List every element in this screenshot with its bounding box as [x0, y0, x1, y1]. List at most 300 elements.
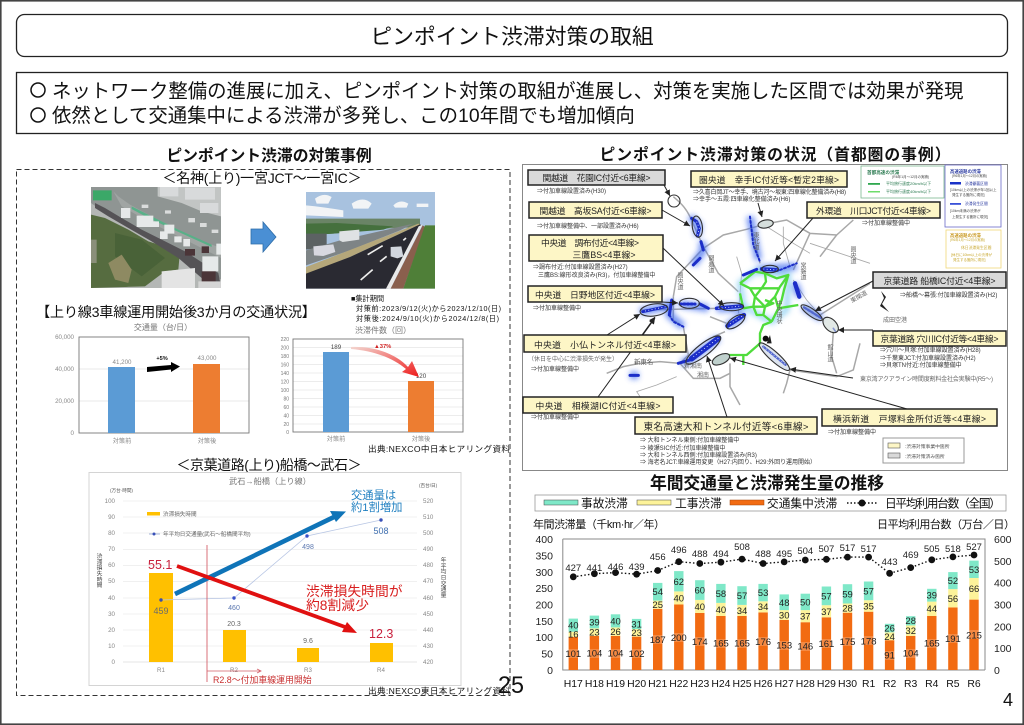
left axis: 300 [535, 567, 553, 579]
callout: Hino [528, 286, 662, 312]
x axis labels: H28 [796, 679, 815, 690]
callout: Yokohama: 横浜新道 戸塚料金所付近等<4車線> [833, 413, 986, 424]
chart legend: 事故渋滞 [581, 496, 628, 510]
callout: Kobotoke: （休日を中心に渋滞損失が発生） [528, 355, 618, 363]
small road names: 圏央道 [849, 246, 856, 265]
combo chart: Keiyo Road: 480 [423, 562, 434, 569]
legend: callout colors: :渋滞対策事業中箇所 [905, 443, 950, 450]
teal labels: 39 [927, 590, 937, 602]
teal labels: 40 [610, 616, 621, 628]
small road names: 東北道 [752, 231, 759, 251]
callout: Satte: 圏央道 幸手IC付近等<暫定2車線> [699, 174, 839, 185]
small road names: 常磐道 [799, 261, 806, 281]
callout: Anagawa: 京葉道路 穴川IC付近等<4車線> [880, 333, 998, 344]
line: daily average traffic: 488 [755, 549, 771, 560]
combo chart: Keiyo Road: 450 [423, 611, 434, 618]
yellow labels [568, 584, 979, 643]
callout: Anagawa: ⇒穴川～貝塚:付加車線設置済み(H28) [880, 346, 981, 354]
right axis: 100 [994, 643, 1012, 655]
x axis labels: H22 [669, 679, 689, 690]
yellow labels: 40 [695, 602, 705, 613]
orange labels: 165 [924, 638, 940, 650]
orange labels: 91 [884, 650, 895, 662]
legend: 渋滞損失時間 [163, 510, 197, 518]
yellow labels: 40 [716, 605, 726, 616]
teal labels: 58 [716, 589, 726, 600]
x axis labels: R1 [862, 679, 875, 690]
combo chart: Keiyo Road: 520 [423, 498, 434, 505]
right axis: 0 [994, 665, 1000, 677]
callout: Sagamiko [523, 397, 673, 421]
heading: metro case status: ピンポイント渋滞対策の状況（首都圏の事例） [600, 145, 950, 164]
small road names: 中央環状 [775, 299, 782, 324]
teal labels: 57 [737, 591, 747, 602]
bar chart: congestion count: 対策後 [412, 435, 431, 443]
orange labels: 174 [692, 637, 708, 648]
bar chart: congestion count: 40 [283, 414, 289, 420]
line: daily average traffic: 456 [650, 552, 666, 563]
bar chart: traffic volume: 20,000 [55, 398, 75, 405]
small road names: 湘南 [697, 371, 709, 379]
callout: Yokohama [822, 409, 997, 436]
left axis: 250 [535, 583, 553, 595]
callout: Hino: ⇒付加車線整備中 [533, 304, 581, 312]
legend: expressway congestion blue [945, 165, 1001, 227]
line: daily average traffic [565, 542, 982, 580]
legend: expressway congestion blue: 渋滞顕著区間 [965, 181, 988, 186]
combo chart: Keiyo Road: 510 [423, 514, 434, 521]
arrow: traffic increase [175, 517, 334, 594]
bar chart: traffic volume: 対策前 [113, 437, 131, 445]
callout: Kawaguchi: 外環道 川口JCT付近<4車線> [816, 205, 931, 216]
combo chart: Keiyo Road: 12.3 [369, 627, 393, 641]
yellow labels: 28 [842, 604, 853, 614]
small road names [634, 231, 907, 379]
callout: Hanazono: ⇒付加車線設置済み(H30) [537, 187, 606, 195]
x axis labels: H18 [585, 679, 604, 690]
text: Aqua Line: 東京湾アクアライン時間度割料金社会実験中(R5～) [860, 375, 993, 383]
teal labels: 31 [631, 620, 642, 630]
teal labels: 62 [674, 577, 684, 588]
green network [723, 272, 798, 365]
bar chart: traffic volume: 0 [71, 430, 75, 437]
summary box: ネットワーク整備の進展に加え、ピンポイント対策の取組が進展し、対策を実施した区間では効果が発現 [52, 80, 963, 102]
legend: callout colors: :渋滞対策済み箇所 [905, 453, 945, 460]
small road names: 新東名 [634, 357, 653, 366]
arrow: before to after [251, 222, 276, 252]
left axis: 350 [535, 550, 553, 562]
callout: Takasaka: ⇒付加車線整備中、一部設置済み(H6) [537, 222, 639, 230]
callout: Anagawa: ⇒千葉東JCT:付加車線設置済み(H2) [880, 354, 976, 362]
left axis [535, 534, 553, 677]
circle: Hanazono [668, 195, 680, 207]
legend: expressway congestion blue: [10km以上の渋滞が年1回以上 [950, 187, 997, 192]
orange labels: 101 [565, 649, 581, 660]
combo chart: Keiyo Road: 420 [423, 659, 434, 666]
line: daily average traffic: 507 [818, 544, 834, 555]
combo chart: Keiyo Road: 80 [108, 530, 116, 537]
x axis labels: H25 [732, 679, 752, 690]
x axis labels: R5 [946, 679, 960, 690]
bar chart: congestion count: 100 [281, 388, 289, 394]
combo chart: Keiyo Road: 9.6 [303, 638, 313, 645]
bar chart: congestion count: 180 [281, 354, 289, 360]
yellow labels: 30 [779, 610, 789, 622]
bar chart: traffic volume [55, 322, 249, 445]
left axis: 0 [547, 665, 553, 677]
callout: Kobotoke: ⇒付加車線整備中 [531, 365, 579, 373]
teal labels: 48 [779, 598, 789, 609]
combo chart: Keiyo Road: (万台·時間) [110, 487, 133, 494]
legend: callout colors [883, 438, 964, 463]
page number 25: 25 [498, 672, 524, 699]
combo chart: Keiyo Road: 460 [423, 595, 434, 602]
callout: Funabashi [873, 272, 1006, 299]
orange labels: 104 [608, 648, 623, 660]
teal labels: 50 [800, 598, 811, 608]
traffic line: 459 [153, 606, 169, 616]
teal labels: 60 [695, 586, 705, 596]
orange labels: 102 [629, 649, 645, 660]
legend: expressway congestion blue: 高速道路の渋滞 [950, 168, 981, 175]
callout: Funabashi: 京葉道路 船橋IC付近<4車線> [884, 275, 996, 286]
right axis: 300 [994, 600, 1012, 612]
line: daily average traffic: 508 [734, 542, 750, 553]
traffic line: 498 [302, 544, 314, 551]
teal labels: 28 [905, 616, 916, 627]
teal labels: 53 [969, 565, 979, 576]
source: NEXCO East: 出典:NEXCO東日本ヒアリング資料 [368, 685, 510, 696]
series: accident [569, 561, 979, 632]
combo chart: Keiyo Road: 470 [423, 578, 434, 585]
yellow labels: 25 [652, 600, 663, 611]
arrow: congestion decrease [177, 566, 345, 627]
callout: Hanazono: 関越道 花園IC付近<6車線> [542, 172, 650, 183]
line: daily average traffic: 488 [692, 549, 708, 560]
callout: Sagamiko: 中央道 相模湖IC付近<4車線> [536, 400, 660, 411]
plot frame [563, 539, 985, 670]
callout: Yokohama: ⇒付加車線整備中 [828, 428, 876, 436]
line: daily average traffic: 427 [565, 563, 581, 574]
title: ピンポイント渋滞対策の取組 [370, 24, 654, 49]
legend: expressway congestion green: (R6年1月～12月の実績) [892, 174, 929, 179]
panel: countermeasure cases [16, 170, 510, 696]
line: daily average traffic: 443 [882, 557, 898, 568]
orange labels: 161 [818, 639, 834, 650]
legend: expressway congestion blue: 発生する箇所に現況] [952, 192, 984, 197]
callout: Takasaka: 関越道 高坂SA付近<6車線> [540, 205, 652, 216]
callout: Yamato: ⇒ 綾瀬SIC付近:付加車線整備中 [640, 444, 725, 452]
combo chart: Keiyo Road: 100 [105, 498, 116, 505]
orange labels: 215 [966, 630, 982, 642]
yellow labels: 23 [589, 628, 600, 638]
page number 4: 4 [1003, 690, 1013, 710]
teal labels: 39 [589, 618, 600, 628]
orange labels: 165 [734, 638, 750, 650]
combo chart: Keiyo Road: 90 [108, 514, 116, 521]
line: daily average traffic: 494 [713, 549, 729, 560]
line: daily average traffic: 441 [586, 563, 602, 574]
callout: Kobotoke: 中央道 小仏トンネル付近<4車線> [534, 339, 676, 350]
label bands [569, 630, 979, 660]
bar chart: traffic volume: 40,000 [55, 366, 75, 373]
source: NEXCO Central: 出典:NEXCO中日本ヒアリング資料 [368, 443, 510, 454]
shape: Narita road [880, 291, 889, 312]
bar chart: traffic volume: 43,000 [198, 355, 217, 362]
map network [607, 197, 870, 405]
series: construction [569, 578, 979, 640]
callout: Hino: 中央道 日野地区付近<4車線> [535, 289, 655, 300]
bar chart: congestion count: 渋滞件数（回） [355, 325, 411, 335]
stacked bar chart: annual congestion [535, 534, 1012, 690]
yellow labels: 34 [737, 606, 747, 617]
blue glow [630, 217, 822, 375]
orange labels: 165 [713, 638, 729, 650]
callout: Yamato [635, 417, 817, 466]
x axis labels: H21 [648, 679, 667, 690]
orange labels: 175 [840, 637, 855, 648]
yellow labels: 24 [884, 632, 895, 643]
teal labels: 26 [884, 624, 895, 634]
callout: Chofu: ⇒調布付近:付加車線設置済み(H27) [533, 263, 628, 271]
heading: traffic status: 【上り線3車線運用開始後3か月の交通状況】 [36, 304, 316, 321]
bar chart: congestion count: 対策前 [327, 435, 345, 443]
small road names: 館山道 [826, 343, 833, 363]
summary box: 依然として交通集中による渋滞が多発し、この10年間でも増加傾向 [52, 105, 635, 127]
leader arrows [598, 185, 907, 417]
yellow labels: 37 [821, 607, 832, 618]
bar chart: traffic volume: 交通量（台/日） [134, 322, 192, 332]
heading: countermeasure cases: ピンポイント渋滞の対策事例 [166, 146, 372, 165]
left axis: 100 [535, 632, 553, 644]
small road names: 新湘南 [684, 362, 702, 370]
x axis labels: H27 [775, 679, 794, 690]
teal labels [568, 565, 979, 634]
line: daily average traffic: 439 [629, 562, 645, 573]
traffic line: 508 [373, 526, 389, 536]
right axis: 600 [994, 534, 1012, 546]
x axis labels: R6 [967, 679, 981, 690]
combo chart: Keiyo Road: 50 [108, 578, 116, 585]
arrow: +5% [147, 362, 180, 372]
combo chart: Keiyo Road: (百台/日) [419, 482, 438, 489]
line: daily average traffic: 469 [903, 550, 919, 561]
right axis: 500 [994, 556, 1012, 568]
callout: Kobotoke [524, 335, 686, 373]
left axis: 400 [535, 534, 553, 546]
chart legend: 工事渋滞 [675, 496, 722, 510]
photo: congestion before [91, 187, 221, 288]
yellow labels: 40 [674, 594, 684, 604]
orange labels: 153 [776, 640, 792, 652]
legend: congestion yellow [946, 230, 1001, 268]
callout: Yamato: ⇒ 大和トンネル東側:付加車線整備中 [640, 436, 739, 444]
chart legend: 交通集中渋滞 [767, 496, 837, 510]
orange labels: 176 [755, 637, 771, 648]
callout: Chofu: 中央道 調布付近<4車線> [541, 237, 639, 248]
right axis: 200 [994, 621, 1012, 633]
callout: Chofu: 三鷹BS<4車線> [572, 249, 636, 260]
orange labels [565, 630, 982, 662]
arrow: decrease [351, 347, 419, 377]
orange labels: 200 [671, 633, 687, 644]
x axis labels: R3 [904, 679, 918, 690]
combo chart: Keiyo Road: 10 [108, 643, 116, 650]
axis title left: 年間渋滞量（千km·hr／年） [533, 517, 665, 531]
bar chart: congestion count: 60 [283, 405, 289, 411]
yellow labels: 34 [758, 602, 768, 613]
heading: annual trend: 年間交通量と渋滞発生量の推移 [650, 473, 884, 493]
line: daily average traffic: 517 [840, 543, 855, 554]
x axis labels: H24 [711, 679, 731, 690]
teal labels: 52 [948, 576, 958, 587]
callout: Yamato: 東名高速大和トンネル付近等<6車線> [644, 421, 809, 433]
small road names: 成田空港 [883, 316, 907, 324]
legend: expressway congestion blue: 渋滞発生区間 [965, 201, 988, 206]
x axis labels: H29 [817, 679, 836, 690]
combo chart: Keiyo Road: 武石→船橋（上り線） [229, 476, 311, 486]
bar chart: traffic volume: 41,200 [113, 359, 132, 366]
combo chart: Keiyo Road: 40 [108, 595, 116, 602]
callout: Chofu [529, 235, 663, 279]
callout: Kawaguchi: ⇒付加車線整備中 [862, 219, 910, 227]
x axis labels: H17 [564, 679, 583, 690]
callout: Takasaka [529, 202, 662, 230]
bar chart: congestion count: 0 [286, 430, 289, 436]
combo chart: Keiyo Road: 430 [423, 643, 434, 650]
line: daily average traffic: 517 [861, 544, 877, 555]
x axis labels: H23 [690, 679, 710, 690]
marker: additional lane start: R2.8～付加車線運用開始 [213, 674, 312, 685]
small road names: 東関道 [849, 289, 869, 305]
orange labels: 187 [650, 635, 666, 646]
combo chart: Keiyo Road: 年平均日交通量 [439, 556, 446, 599]
x axis labels: H30 [838, 679, 857, 690]
combo chart: Keiyo Road: 20.3 [227, 621, 241, 628]
combo chart: Keiyo Road: R1 [157, 667, 166, 674]
small road names: 圏央道 [676, 272, 683, 291]
bar chart: congestion count: 140 [281, 371, 289, 377]
bar chart: congestion count: 120 [281, 380, 289, 386]
text: aggregation period: 対策前:2023/9/12(火)から2023/12/10(日) [356, 304, 501, 313]
callout: traffic increase: 約1割増加 [351, 500, 402, 514]
subheading: Meishin: ＜名神(上り)一宮JCT～一宮IC＞ [162, 170, 362, 186]
x axis labels: H19 [606, 679, 625, 690]
legend [147, 510, 251, 538]
yellow labels: 44 [927, 604, 937, 615]
bar chart: congestion count [281, 325, 463, 443]
bar chart: congestion count: 20 [283, 422, 289, 428]
legend: congestion yellow: 高速道路の渋滞 [950, 232, 981, 239]
line: daily average traffic: 505 [924, 544, 940, 555]
callout: Chofu: 三鷹BS:線形改良済み(R3)，付加車線整備中 [538, 271, 655, 279]
combo chart: Keiyo Road: 55.1 [148, 558, 172, 572]
right axis [994, 534, 1012, 677]
yellow labels: 16 [568, 630, 579, 640]
blue segments [630, 217, 836, 375]
teal labels: 57 [821, 592, 832, 602]
x axis labels: H20 [627, 679, 646, 690]
combo chart: Keiyo Road: 30 [108, 611, 116, 618]
legend: expressway congestion green: 平均旅行速度40km/h以下 [886, 188, 931, 194]
teal labels: 59 [842, 590, 853, 600]
combo chart: Keiyo Road [89, 472, 461, 686]
left axis: 150 [535, 616, 553, 628]
orange labels: 191 [945, 634, 961, 645]
legend: expressway congestion blue: (R6年1月～12月の実績) [952, 173, 987, 178]
label: -37%: ▲37% [374, 344, 391, 350]
congestion ellipses [639, 215, 841, 373]
legend: congestion yellow: 発生する箇所に現況] [953, 257, 985, 262]
combo chart: Keiyo Road: R4 [377, 667, 386, 674]
legend: expressway congestion blue: 上発生する箇所に現況] [952, 214, 988, 219]
bar chart: congestion count: 160 [281, 362, 289, 368]
combo chart: Keiyo Road: 20 [108, 627, 116, 634]
legend: expressway congestion green: 平均旅行速度20km/h以下 [886, 180, 931, 186]
callout: Satte [691, 171, 847, 203]
text: aggregation period: 対策後:2024/9/10(火)から2024/12/8(日) [356, 314, 499, 323]
yellow labels: 23 [631, 628, 642, 639]
callout: Sagamiko: ⇒付加車線整備中 [531, 413, 579, 421]
callout: Satte: ⇒幸手～五霞:四車線化整備済み(H6) [693, 195, 790, 203]
callout: Kawaguchi [807, 202, 940, 227]
x axis labels: R2 [883, 679, 896, 690]
bar chart: congestion count: 80 [283, 396, 289, 402]
orange labels: 104 [903, 648, 919, 660]
callout: congestion decrease [306, 584, 403, 613]
callout: Anagawa: ⇒貝塚TN付近:付加車線整備中 [880, 361, 962, 369]
summary box [16, 72, 1008, 134]
line: daily average traffic: 518 [945, 544, 961, 555]
orange labels: 146 [797, 642, 813, 652]
title [16, 14, 1008, 56]
x axis labels [564, 679, 981, 690]
left axis: 50 [541, 649, 553, 661]
teal labels: 40 [568, 620, 579, 632]
line: daily average traffic: 496 [671, 545, 687, 556]
marker: additional lane start [207, 545, 312, 685]
legend: expressway congestion green [861, 166, 944, 198]
combo chart: Keiyo Road: 0 [112, 659, 116, 666]
right axis: 400 [994, 578, 1012, 590]
x axis labels: R4 [925, 679, 939, 690]
small road names: 関越道 [707, 255, 714, 274]
x axis labels: H26 [754, 679, 773, 690]
callout: traffic increase [351, 489, 402, 514]
bar chart: congestion count: 200 [281, 346, 289, 352]
yellow labels: 56 [948, 594, 958, 605]
line: daily average traffic: 495 [776, 549, 792, 560]
yellow labels: 66 [969, 584, 979, 595]
chart legend [535, 495, 1006, 511]
series: traffic concentration [569, 600, 979, 670]
legend: 年平均日交通量(武石～船橋間平均) [163, 530, 251, 538]
legend: congestion yellow: [休日に10km以上の渋滞が [951, 252, 993, 257]
subheading: Keiyo Road: ＜京葉道路(上り)船橋～武石＞ [176, 457, 362, 473]
label: +5%: +5% [156, 356, 168, 362]
text: aggregation period [351, 294, 501, 323]
combo chart: Keiyo Road: 440 [423, 627, 434, 634]
line: daily average traffic: 527 [966, 542, 982, 553]
traffic line: 460 [228, 605, 240, 612]
combo chart: Keiyo Road: R3 [304, 667, 313, 674]
legend: expressway congestion green: 首都高速の渋滞 [867, 169, 900, 176]
callout: Funabashi: ⇒船橋～幕張:付加車線設置済み(H2) [900, 291, 997, 299]
bar chart: congestion count: 189 [331, 344, 342, 351]
combo chart: Keiyo Road: 490 [423, 546, 434, 553]
callout: congestion decrease: 約8割減少 [306, 597, 369, 613]
line: daily average traffic: 504 [797, 546, 813, 557]
